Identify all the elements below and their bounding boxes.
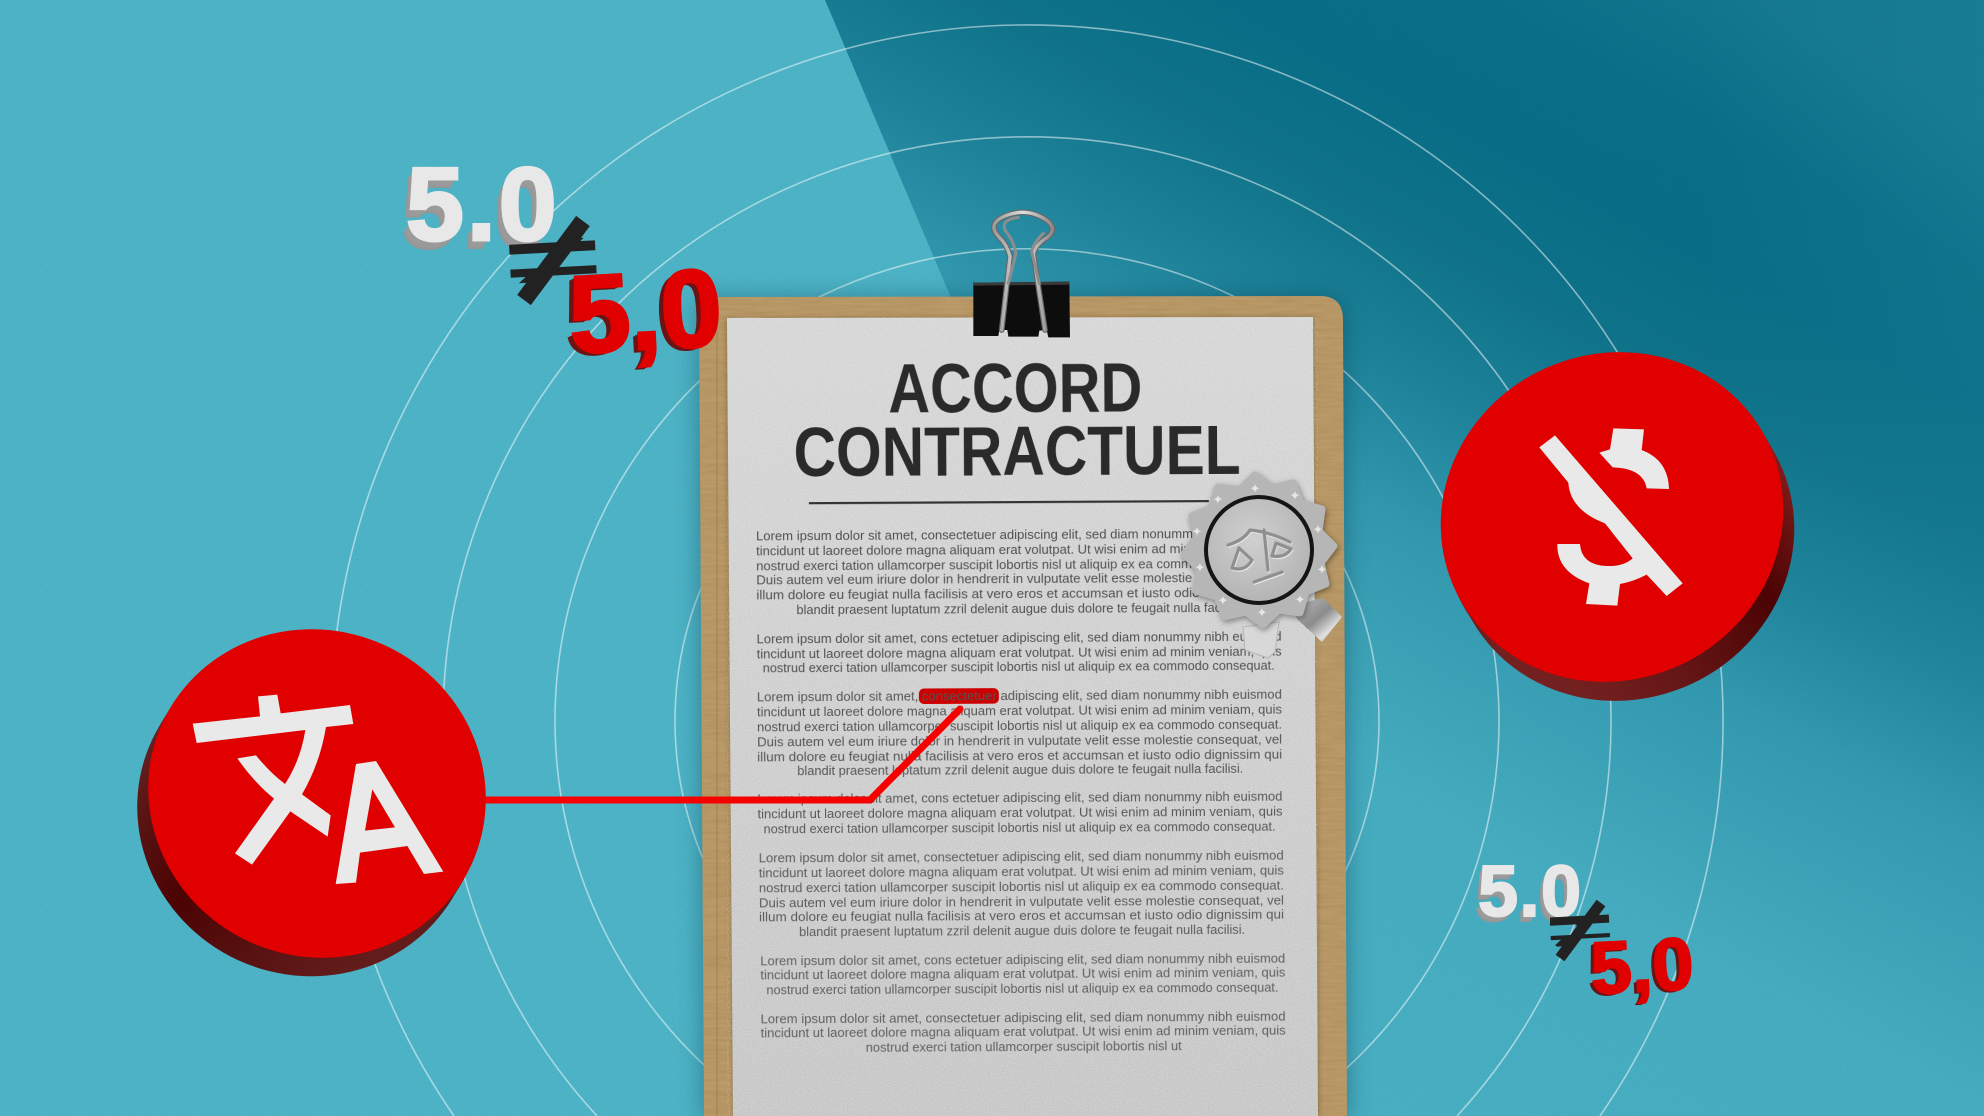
seal stars: ✦ — [1295, 593, 1306, 608]
paragraph 3: tincidunt ut laoreet dolore magna aliquam erat volutpat. Ut wisi enim ad minim veniam, quis — [757, 703, 1282, 719]
number 5,0 in red: 5,0 — [1588, 922, 1696, 1010]
paragraph 5: tincidunt ut laoreet dolore magna aliquam erat volutpat. Ut wisi enim ad minim veniam, quis — [759, 864, 1284, 880]
icon: black binder clip — [973, 212, 1070, 337]
clipboard board — [695, 290, 1355, 1116]
seal star edge — [1184, 475, 1334, 625]
paragraph 1: tincidunt ut laoreet dolore magna aliquam erat volutpat. Ut wisi enim ad minim veniam, quis — [756, 542, 1281, 558]
paragraph 7: Lorem ipsum dolor sit amet, consectetuer adipiscing elit, sed diam nonummy nibh euismod — [761, 1010, 1286, 1026]
seal stars: ✦ — [1213, 493, 1224, 508]
paragraph 7: tincidunt ut laoreet dolore magna aliquam erat volutpat. Ut wisi enim ad minim veniam, quis — [761, 1024, 1286, 1040]
seal stars: ✦ — [1290, 489, 1301, 504]
paragraph 5: nostrud exerci tation ullamcorper suscipit lobortis nisl ut aliquip ex ea commodo consequat. — [759, 879, 1284, 895]
highlight on word consectetuer — [919, 688, 999, 704]
paragraph 7: nostrud exerci tation ullamcorper suscipit lobortis nisl ut — [866, 1039, 1182, 1055]
seal stars: ✦ — [1317, 563, 1328, 578]
seal disc — [1206, 497, 1312, 603]
number comparison: top left, 5.0 differs from 5,0 — [403, 147, 725, 377]
number 5,0 in red: 5,0 — [566, 246, 725, 377]
paragraph 1: Lorem ipsum dolor sit amet, consectetuer adipiscing elit, sed diam nonummy nibh euismod — [756, 527, 1281, 543]
seal ribbons — [1243, 598, 1342, 658]
paragraph 4 — [757, 790, 1283, 836]
not-equal sign: ≠ — [1539, 885, 1621, 965]
seal stars: ✦ — [1313, 523, 1324, 538]
paragraph 3 — [757, 688, 1282, 778]
not-equal sign — [509, 216, 597, 306]
paragraph 6: Lorem ipsum dolor sit amet, cons ectetuer adipiscing elit, sed diam nonummy nibh euismod — [760, 952, 1285, 968]
paragraph 4: Lorem ipsum dolor sit amet, cons ectetuer adipiscing elit, sed diam nonummy nibh euismod — [757, 790, 1282, 806]
paragraph 1: nostrud exerci tation ullamcorper suscipit lobortis nisl ut aliquip ex ea commodo consequat. — [756, 557, 1281, 573]
not-equal sign: ≠ — [493, 199, 612, 314]
paragraph 3: nostrud exerci tation ullamcorper suscipit lobortis nisl ut aliquip ex ea commodo consequat. — [757, 718, 1282, 734]
title: accord contractuel: CONTRACTUEL — [793, 411, 1241, 491]
number 5.0 in white: 5.0 — [1478, 852, 1583, 932]
paragraph 2: Lorem ipsum dolor sit amet, cons ectetuer adipiscing elit, sed diam nonummy nibh euismod — [757, 630, 1282, 646]
paragraph 3: blandit praesent luptatum zzril delenit augue duis dolore te feugait nulla facilisi. — [797, 762, 1243, 778]
paragraph 5: illum dolore eu feugiat nulla facilisis at vero eros et accumsan et iusto odio dignissim qui — [759, 908, 1284, 924]
number comparison: bottom right, 5.0 differs from 5,0 — [1476, 852, 1696, 1010]
seal stars: ✦ — [1218, 594, 1229, 609]
paper sheet — [727, 317, 1318, 1116]
number 5.0 in white: 5.0 — [406, 147, 560, 263]
paragraph 2 — [757, 630, 1282, 675]
seal: silver wax stamp with scales and ribbons — [1184, 475, 1342, 658]
paragraph 5: Duis autem vel eum iriure dolor in hendrerit in vulputate velit esse molestie consequat, vel — [759, 894, 1284, 910]
panel: clipboard with contract document — [686, 210, 1360, 1116]
not-equal sign — [1550, 900, 1610, 962]
document text, slightly rotated — [755, 348, 1286, 1055]
paragraph 1: blandit praesent luptatum zzril delenit augue duis dolore te feugait nulla facilisi. — [796, 601, 1242, 617]
paragraph 3: Duis autem vel eum iriure dolor in hendrerit in vulputate velit esse molestie consequat, vel — [757, 733, 1282, 749]
paragraph 4: nostrud exerci tation ullamcorper suscipit lobortis nisl ut aliquip ex ea commodo consequat. — [764, 820, 1276, 836]
seal stars: ✦ — [1257, 606, 1268, 621]
paragraph 2: nostrud exerci tation ullamcorper suscipit lobortis nisl ut aliquip ex ea commodo consequat. — [763, 659, 1275, 675]
paragraph 5: blandit praesent luptatum zzril delenit augue duis dolore te feugait nulla facilisi. — [799, 923, 1245, 939]
paragraph 1: illum dolore eu feugiat nulla facilisis at vero eros et accumsan et iusto odio dignissim qui — [756, 586, 1281, 602]
seal stars — [1192, 482, 1328, 621]
paragraph 6: nostrud exerci tation ullamcorper suscipit lobortis nisl ut aliquip ex ea commodo consequat. — [766, 981, 1278, 997]
paragraph 2: tincidunt ut laoreet dolore magna aliquam erat volutpat. Ut wisi enim ad minim veniam, quis — [757, 645, 1282, 661]
paragraph 5: Lorem ipsum dolor sit amet, consectetuer adipiscing elit, sed diam nonummy nibh euismod — [759, 849, 1284, 865]
paragraph 6: tincidunt ut laoreet dolore magna aliquam erat volutpat. Ut wisi enim ad minim veniam, quis — [760, 966, 1285, 982]
seal stars: ✦ — [1192, 525, 1203, 540]
paragraph 1: Duis autem vel eum iriure dolor in hendrerit in vulputate velit esse molestie consequat, vel — [756, 571, 1281, 587]
paragraph 4: tincidunt ut laoreet dolore magna aliquam erat volutpat. Ut wisi enim ad minim veniam, quis — [757, 805, 1283, 821]
paragraph 3: illum dolore eu feugiat nulla facilisis at vero eros et accumsan et iusto odio dignissim qui — [757, 748, 1282, 764]
title: accord contractuel — [793, 348, 1241, 491]
paragraph 5 — [759, 849, 1284, 939]
paragraph 3: Lorem ipsum dolor sit amet, consectetuer adipiscing elit, sed diam nonummy nibh euismod — [757, 688, 1282, 704]
paragraph 1 — [756, 527, 1281, 617]
seal stars: ✦ — [1250, 482, 1261, 497]
title: accord contractuel: ACCORD — [888, 348, 1142, 428]
seal stars: ✦ — [1195, 561, 1206, 576]
paragraph 6 — [760, 952, 1285, 997]
seal scales icon — [1228, 530, 1292, 583]
title rule — [809, 500, 1209, 504]
paragraph 7 — [761, 1010, 1286, 1055]
